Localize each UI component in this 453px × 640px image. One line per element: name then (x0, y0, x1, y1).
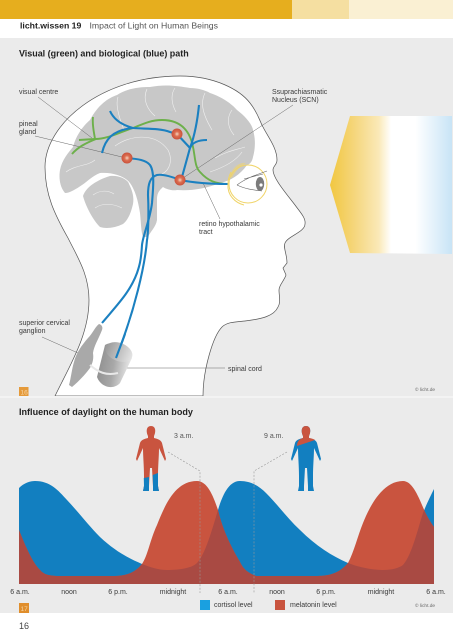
figure: 9 a.m. (291, 426, 321, 491)
icon: superior cervical ganglion (69, 324, 102, 387)
time axis labels: midnight (368, 589, 394, 596)
time axis labels: 6 a.m. (218, 589, 238, 596)
figure number 17 (19, 603, 29, 613)
time axis labels: 6 a.m. (10, 589, 30, 596)
icon: spinal cord (90, 334, 135, 387)
label: pineal gland: pineal (19, 121, 38, 128)
band between panels (0, 396, 453, 398)
label: retino hypothalamic tract: retino hypothalamic (199, 221, 260, 228)
head silhouette (45, 76, 305, 396)
legend: melatonin (275, 600, 337, 610)
light gradient arrow (330, 116, 452, 254)
label: 3 a.m.: 3 a.m. (174, 433, 194, 440)
figure number 16 (19, 387, 28, 396)
area chart (19, 481, 434, 584)
time axis labels (10, 589, 446, 596)
heading: path: Visual (green) and biological (blue) path (19, 48, 189, 58)
header text: Impact of Light on Human Beings (90, 20, 219, 30)
header text: licht.wissen 19 (20, 20, 81, 30)
time axis labels: 6 p.m. (316, 589, 336, 596)
blue biological path (102, 105, 228, 358)
nodes (122, 128, 186, 186)
time axis labels: 6 p.m. (108, 589, 128, 596)
panel: visual and biological path (0, 38, 453, 396)
label: visual centre: visual centre (19, 89, 58, 96)
panel: influence of daylight (0, 398, 453, 613)
icon: eye (228, 163, 267, 205)
label: superior cervical ganglion: ganglion (19, 328, 46, 335)
legend: cortisol (200, 600, 253, 610)
leader lines (35, 97, 293, 368)
label: SCN: Nucleus (SCN) (272, 97, 319, 104)
label: pineal gland: gland (19, 129, 36, 136)
dashed time markers (168, 452, 287, 593)
page number: 16 (19, 621, 29, 631)
label: retino hypothalamic tract: tract (199, 229, 213, 236)
credit: © licht.de (415, 602, 435, 609)
figure: 3 a.m. (136, 426, 166, 491)
label: 9 a.m.: 9 a.m. (264, 433, 284, 440)
credit: © licht.de (415, 386, 435, 393)
legend: melatonin: melatonin level (290, 602, 337, 609)
time axis labels: noon (61, 589, 77, 596)
time axis labels: midnight (160, 589, 186, 596)
header colour bar (0, 0, 453, 19)
time axis labels: 6 a.m. (426, 589, 446, 596)
heading: daylight: Influence of daylight on the human body (19, 407, 193, 417)
label: spinal cord: spinal cord (228, 366, 262, 373)
label: SCN: Ssuprachiasmatic (272, 89, 328, 96)
figure number 17: 17 (20, 606, 28, 613)
label: superior cervical ganglion: superior cervical (19, 320, 70, 327)
legend: cortisol: cortisol level (214, 602, 253, 609)
time axis labels: noon (269, 589, 285, 596)
green visual path (72, 117, 228, 184)
figure number 16: 16 (20, 390, 28, 396)
brain (60, 85, 255, 237)
